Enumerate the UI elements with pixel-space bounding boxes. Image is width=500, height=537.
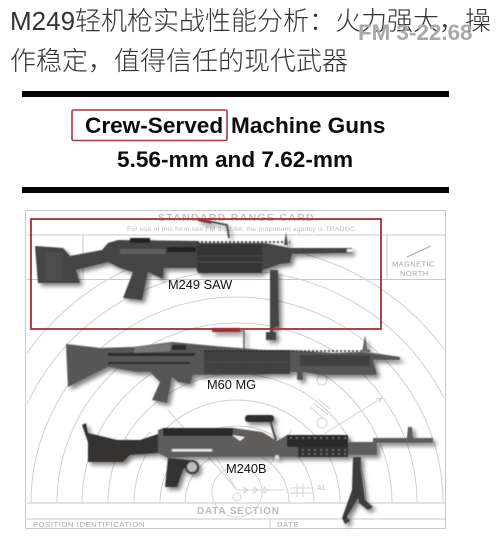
title: 作稳定，值得信任的现代武器	[10, 46, 348, 76]
title: M249轻机枪实战性能分析：火力强大，操	[10, 6, 491, 36]
sector sketch lines	[125, 375, 382, 517]
card labels: A1	[317, 485, 326, 492]
watermark: FM 3-22.68: FM 3-22.68	[358, 20, 472, 45]
bottom rule	[22, 187, 449, 193]
range arcs	[27, 245, 444, 503]
heading: crew-served machine guns: Machine Guns	[231, 113, 385, 138]
heading: crew-served machine guns	[85, 113, 385, 172]
gun: M249 SAW	[35, 218, 352, 340]
card labels: NORTH	[400, 269, 429, 278]
card labels: MAGNETIC	[392, 260, 435, 268]
gun: M60 MG	[66, 328, 400, 403]
gun: M240B	[82, 415, 433, 524]
heading: crew-served machine guns: Crew-Served	[85, 113, 223, 138]
card labels: POSITION IDENTIFICATION	[33, 520, 145, 529]
card labels	[33, 212, 435, 529]
label: M249 SAW: M249 SAW	[168, 277, 233, 292]
panel: standard range card	[26, 210, 446, 528]
card labels: For use of this form see FM 3-22.68; the proponent agency is TRADOC.	[127, 226, 357, 233]
label: M60 MG: M60 MG	[207, 377, 256, 392]
top rule	[22, 91, 449, 97]
red highlight: crew-served	[72, 110, 227, 140]
card labels: DATA SECTION	[197, 506, 280, 517]
title	[10, 6, 491, 76]
card labels: DATE	[277, 520, 299, 529]
card labels: STANDARD RANGE CARD	[158, 212, 315, 224]
label: M240B: M240B	[226, 461, 267, 476]
red highlight: M249	[31, 219, 381, 329]
heading: crew-served machine guns: 5.56-mm and 7.62-mm	[117, 147, 353, 172]
